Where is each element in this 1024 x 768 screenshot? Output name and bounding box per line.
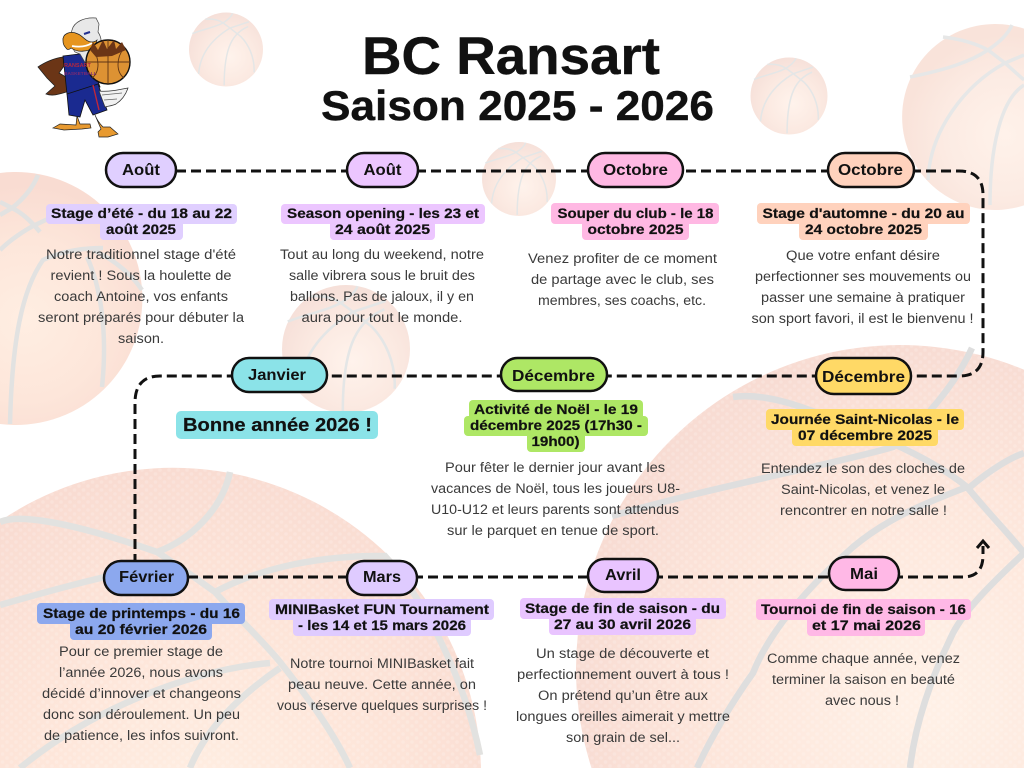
event: stage d'automne: Que votre enfant désire	[786, 248, 940, 263]
event: MINIBasket FUN Tournament: vous réserve quelques surprises !	[277, 698, 487, 713]
event: activité de Noël: sur le parquet en tenue de sport.	[447, 523, 659, 538]
event: activité de Noël	[431, 358, 680, 538]
event: season opening: Tout au long du weekend, notre	[280, 247, 484, 262]
event: stage d'automne: Stage d'automne - du 20 au	[762, 206, 964, 221]
event: stage d'été: Stage d’été - du 18 au 22	[51, 206, 232, 221]
event: stage de printemps: Pour ce premier stage de	[59, 644, 223, 659]
event: season opening: aura pour tout le monde.	[302, 310, 462, 325]
event: stage de fin de saison	[516, 559, 730, 745]
event: season opening: ballons. Pas de jaloux, il y en	[290, 289, 474, 304]
event: stage d'automne: perfectionner ses mouvements ou	[755, 269, 971, 284]
event: MINIBasket FUN Tournament: Notre tournoi MINIBasket fait	[290, 656, 474, 671]
title	[321, 27, 714, 129]
event: MINIBasket FUN Tournament: - les 14 et 15 mars 2026	[298, 618, 467, 633]
event: journée Saint-Nicolas: Journée Saint-Nicolas - le	[771, 412, 960, 427]
event: tournoi de fin de saison: Mai	[850, 566, 878, 583]
event: tournoi de fin de saison: Tournoi de fin de saison - 16	[761, 602, 967, 617]
event: souper du club: de partage avec le club, ses	[531, 272, 714, 287]
mascot: eagle with basketball	[38, 18, 130, 137]
event: journée Saint-Nicolas: rencontrer en notre salle !	[780, 503, 947, 518]
event: stage d'automne: passer une semaine à pratiquer	[761, 290, 966, 305]
event: journée Saint-Nicolas	[761, 358, 965, 518]
event: activité de Noël: U10-U12 et leurs parents sont attendus	[431, 502, 679, 517]
event: stage de printemps: de patience, les infos suivront.	[44, 728, 239, 743]
event: activité de Noël: Pour fêter le dernier jour avant les	[445, 460, 665, 475]
event: MINIBasket FUN Tournament	[269, 561, 494, 713]
event: stage de printemps: Stage de printemps - du 16	[43, 606, 241, 621]
event: souper du club: octobre 2025	[588, 222, 684, 237]
event: activité de Noël: Décembre	[512, 368, 595, 385]
event: season opening	[280, 153, 485, 325]
event: stage d'été: seront préparés pour débuter la	[38, 310, 245, 325]
event: activité de Noël: décembre 2025 (17h30 -	[470, 418, 642, 433]
event: stage de fin de saison: Stage de fin de saison - du	[525, 601, 720, 616]
dashed timeline path with arrow	[135, 171, 989, 577]
event: stage d'été: coach Antoine, vos enfants	[54, 289, 228, 304]
event: bonne année: Janvier	[248, 367, 306, 384]
event: stage de fin de saison: 27 au 30 avril 2026	[554, 617, 692, 632]
event: tournoi de fin de saison: Comme chaque année, venez	[767, 651, 960, 666]
event: stage d'été: revient ! Sous la houlette de	[50, 268, 231, 283]
event: journée Saint-Nicolas: Entendez le son des cloches de	[761, 461, 965, 476]
event: journée Saint-Nicolas: 07 décembre 2025	[798, 428, 933, 443]
event: stage de fin de saison: Avril	[605, 567, 641, 584]
event: activité de Noël: Activité de Noël - le 19	[474, 402, 638, 417]
mascot: eagle with basketball: RANSART	[64, 63, 92, 69]
event: tournoi de fin de saison	[756, 557, 971, 708]
mascot: eagle with basketball: BASKETBALL	[64, 71, 97, 77]
event: season opening: 24 août 2025	[335, 222, 431, 237]
event: tournoi de fin de saison: terminer la saison en beauté	[772, 672, 955, 687]
event: season opening: Season opening - les 23 et	[287, 206, 480, 221]
event: stage de fin de saison: son grain de sel...	[566, 730, 680, 745]
event: stage d'automne: Octobre	[838, 162, 903, 179]
event: stage d'été: Notre traditionnel stage d'été	[46, 247, 236, 262]
event: activité de Noël: vacances de Noël, tous les joueurs U8-	[431, 481, 680, 496]
event: MINIBasket FUN Tournament: Mars	[363, 569, 401, 586]
event: journée Saint-Nicolas: Décembre	[822, 369, 905, 386]
event: bonne année	[176, 358, 378, 439]
event: stage de printemps: l’année 2026, nous avons	[59, 665, 223, 680]
event: stage de printemps: décidé d’innover et changeons	[42, 686, 241, 701]
event: stage de printemps: Février	[119, 569, 174, 586]
event: season opening: Août	[364, 162, 402, 179]
event: stage d'automne	[752, 153, 974, 326]
event: MINIBasket FUN Tournament: MINIBasket FUN Tournament	[275, 602, 490, 617]
event: stage d'automne: son sport favori, il est le bienvenu !	[752, 311, 974, 326]
event: stage de printemps	[37, 561, 245, 743]
event: souper du club: membres, ses coachs, etc.	[538, 293, 706, 308]
event: season opening: salle vibrera sous le bruit des	[289, 268, 475, 283]
event: stage d'automne: 24 octobre 2025	[805, 222, 923, 237]
event: stage de printemps: donc son déroulement. Un peu	[43, 707, 240, 722]
event: stage d'été: saison.	[118, 331, 164, 346]
event: activité de Noël: 19h00)	[532, 434, 580, 449]
event: souper du club: Souper du club - le 18	[558, 206, 714, 221]
event: stage de fin de saison: perfectionnement ouvert à tous !	[517, 667, 729, 682]
event: journée Saint-Nicolas: Saint-Nicolas, et venez le	[781, 482, 945, 497]
event: stage d'été	[38, 153, 245, 346]
event: stage de fin de saison: Un stage de découverte et	[536, 646, 709, 661]
event: stage d'été: août 2025	[106, 222, 177, 237]
event: MINIBasket FUN Tournament: peau neuve. Cette année, on	[288, 677, 476, 692]
event: souper du club: Venez profiter de ce moment	[528, 251, 717, 266]
subtitle: Saison 2025 - 2026	[321, 82, 714, 129]
event: stage de fin de saison: On prétend qu’un être aux	[538, 688, 708, 703]
event: bonne année: Bonne année 2026 !	[183, 415, 372, 435]
event: tournoi de fin de saison: et 17 mai 2026	[812, 618, 922, 633]
title: BC Ransart	[362, 27, 660, 86]
event: stage de printemps: au 20 février 2026	[75, 622, 208, 637]
event: souper du club	[528, 153, 719, 308]
event: stage de fin de saison: longues oreilles aimerait y mettre	[516, 709, 730, 724]
event: stage d'été: Août	[122, 162, 160, 179]
event: tournoi de fin de saison: avec nous !	[825, 693, 899, 708]
event: souper du club: Octobre	[603, 162, 668, 179]
